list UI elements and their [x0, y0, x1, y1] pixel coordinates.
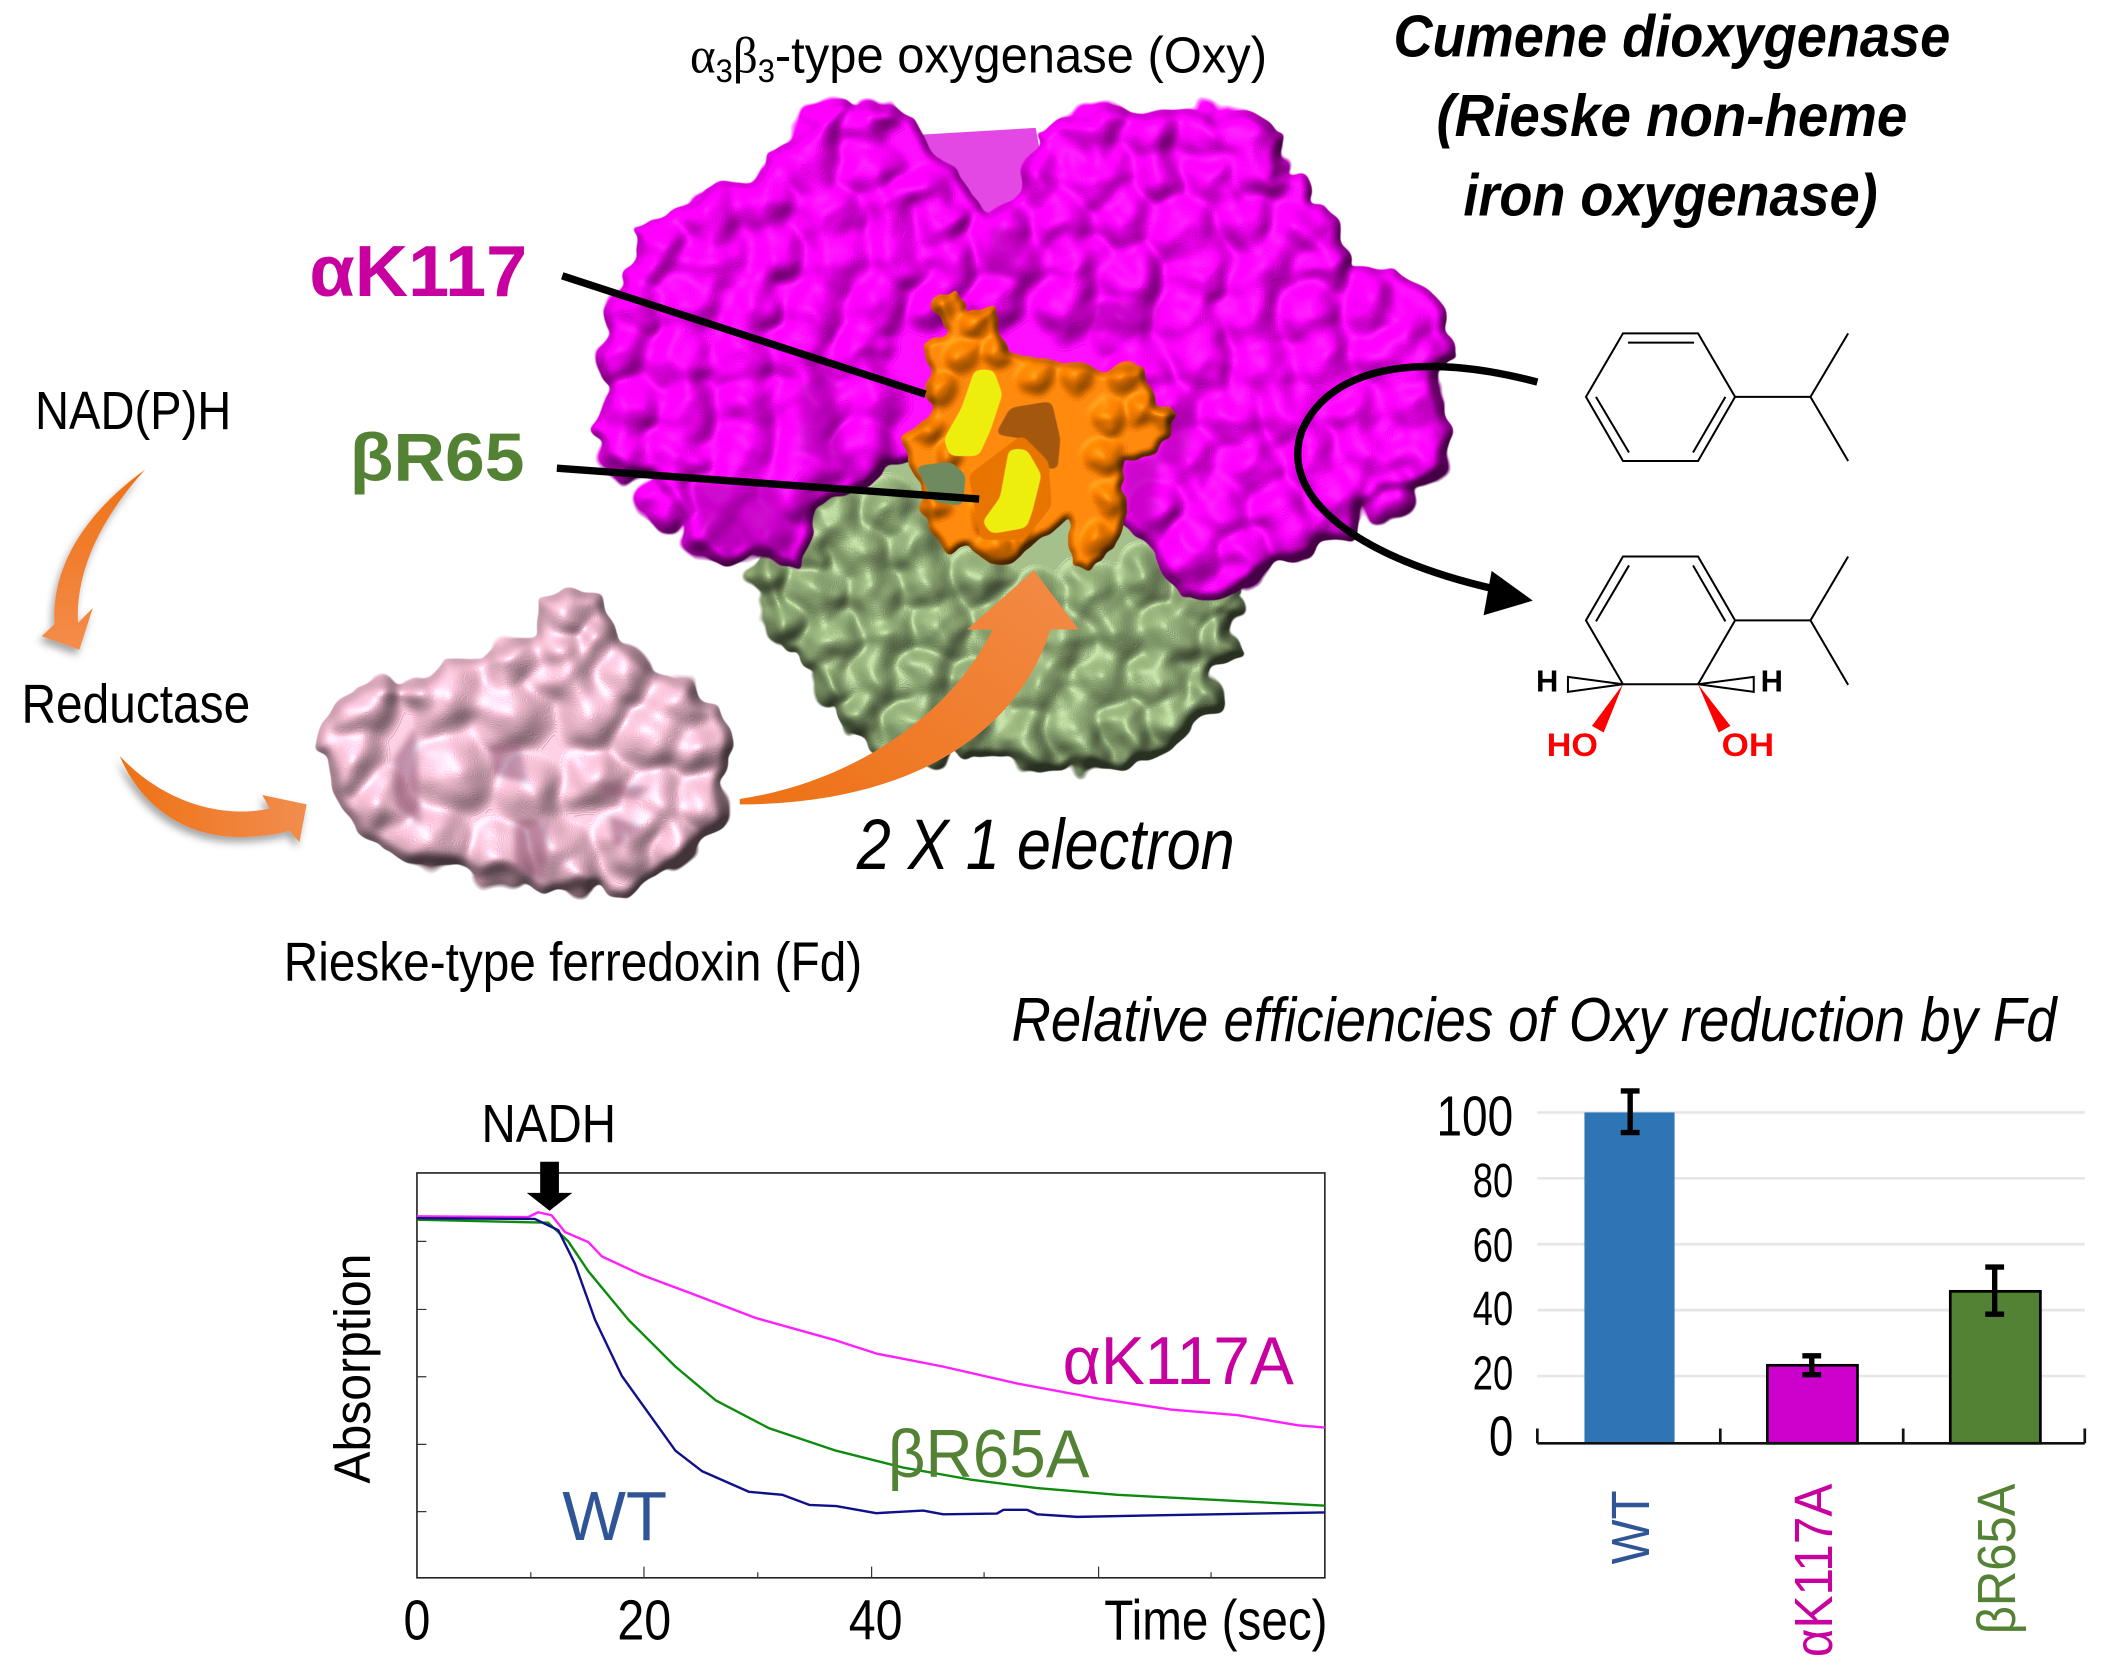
bar: betaR65A — [1950, 1291, 2040, 1443]
label: ferredoxin: Rieske-type ferredoxin (Fd) — [284, 931, 862, 993]
dark pocket — [995, 401, 1060, 470]
y tick 80: 80 — [1473, 1154, 1513, 1208]
y tick 20: 20 — [1473, 1346, 1513, 1400]
x axis title: Time (sec) — [1104, 1589, 1328, 1652]
ferredoxin body — [322, 585, 733, 903]
curve: alphaK117A — [417, 1212, 1325, 1428]
panel: oxygenase protein surface — [589, 89, 1460, 782]
heading: oxygenase label: β — [733, 28, 758, 85]
arrow: Fd to Oxy electron transfer — [740, 570, 1079, 804]
heading: oxygenase label: α — [690, 28, 716, 85]
y tick 60: 60 — [1473, 1219, 1513, 1273]
heading: oxygenase label: 3 — [758, 53, 775, 89]
title line 1: Cumene dioxygenase — [1393, 3, 1950, 70]
heading: oxygenase label: -type oxygenase (Oxy) — [775, 27, 1267, 84]
orange front lobe — [969, 435, 1052, 540]
arrow: substrate to product — [1298, 367, 1537, 615]
title — [1393, 3, 1950, 228]
x tick 20: 20 — [617, 1589, 671, 1652]
central orange interface patch — [907, 291, 1176, 569]
chemical structure: cumene dihydrodiol — [1536, 557, 1848, 763]
y tick 100: 100 — [1436, 1084, 1513, 1147]
curve: WT — [417, 1218, 1325, 1517]
y axis label: Absorption — [324, 1254, 381, 1484]
shaded folds on alpha subunit — [691, 229, 1194, 547]
back subunit — [921, 128, 1056, 235]
label: betaR65: βR65 — [350, 420, 525, 495]
arrow curve — [1298, 367, 1537, 589]
title line 2: (Rieske non-heme — [1436, 82, 1907, 149]
y tick 0: 0 — [1489, 1404, 1513, 1467]
plot frame — [417, 1173, 1325, 1578]
curve label: betaR65A: βR65A — [888, 1417, 1090, 1492]
heading: oxygenase label: 3 — [716, 53, 733, 89]
y tick 40: 40 — [1473, 1282, 1513, 1336]
bar: alphaK117A — [1767, 1365, 1857, 1443]
residue alphaK117 (yellow) — [944, 370, 1002, 456]
curve label: WT: WT — [562, 1477, 667, 1555]
curve: betaR65A — [417, 1220, 1325, 1506]
atom label OH: OH — [1722, 727, 1774, 763]
atom label H right: H — [1761, 663, 1783, 698]
label: NADH: NADH — [482, 1094, 616, 1154]
label: Reductase: Reductase — [22, 672, 250, 734]
y axis labels — [1436, 1084, 1513, 1467]
NADH arrow — [527, 1162, 572, 1211]
baseline axis — [1537, 1429, 2085, 1443]
alpha subunit surface (magenta) — [589, 89, 1460, 594]
leader line: betaR65 — [557, 468, 979, 499]
label: NAD(P)H: NAD(P)H — [35, 381, 231, 441]
atom label HO: HO — [1547, 727, 1598, 763]
line chart: absorption time course — [324, 1094, 1328, 1652]
green patch in pocket — [915, 461, 966, 506]
curve label: alphaK117A: αK117A — [1063, 1324, 1294, 1399]
arrow: reductase to ferredoxin — [120, 756, 307, 842]
residue betaR65 (yellow) — [982, 449, 1041, 534]
category label: alphaK117A: αK117A — [1784, 1484, 1844, 1657]
arrow head — [1484, 571, 1533, 615]
error bars — [1621, 1090, 2004, 1376]
ferredoxin shaded cavities — [394, 726, 648, 880]
category label: WT: WT — [1601, 1490, 1661, 1564]
x axis labels — [404, 1589, 1328, 1652]
label: alphaK117: αK117 — [309, 231, 527, 312]
x tick 40: 40 — [849, 1589, 903, 1652]
bar: WT — [1584, 1112, 1675, 1443]
title line 3: iron oxygenase) — [1463, 161, 1878, 228]
atom label H left: H — [1536, 663, 1558, 698]
leader line: alphaK117 — [562, 276, 925, 394]
bar chart: relative efficiencies — [1436, 1084, 2085, 1657]
label: electron count: 2 X 1 electron — [856, 805, 1235, 885]
chemical structure: cumene — [1586, 333, 1848, 461]
arrow: NAD(P)H to reductase — [42, 469, 145, 650]
beta subunit surface (green) — [740, 421, 1252, 782]
x tick 0: 0 — [404, 1589, 430, 1652]
plot ticks and curves — [417, 1162, 1325, 1578]
panel: ferredoxin protein surface — [322, 585, 733, 903]
category label: betaR65A: βR65A — [1967, 1484, 2027, 1634]
skeleton bonds — [1568, 557, 1848, 733]
